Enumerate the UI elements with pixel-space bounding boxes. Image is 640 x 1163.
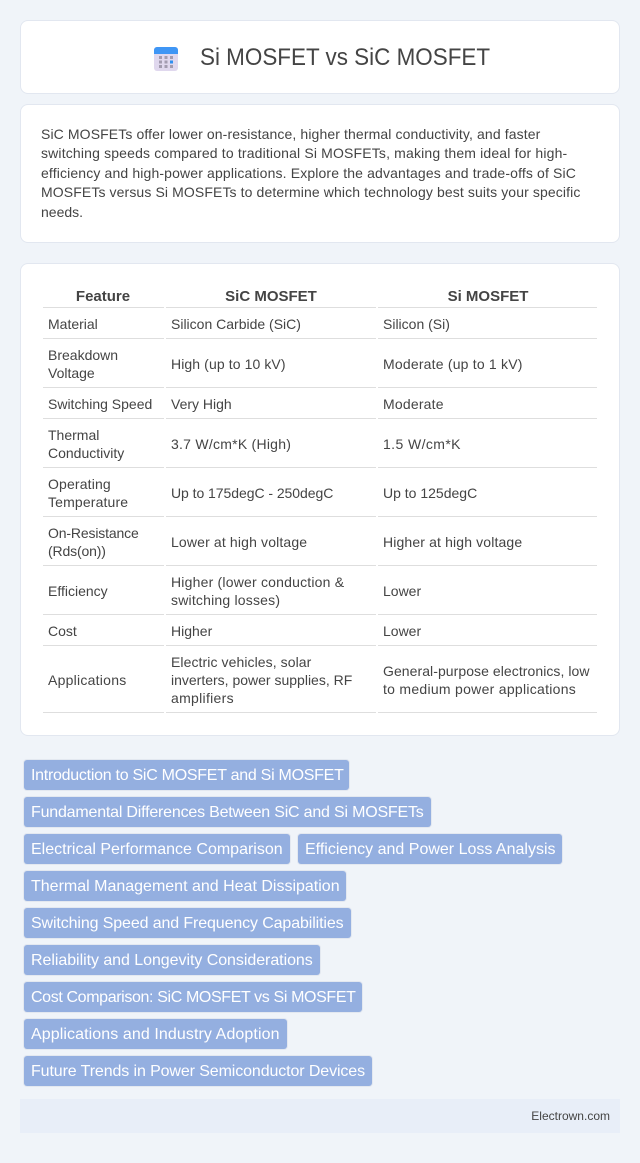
row: Operating Temperature — [48, 476, 128, 510]
comparison table: switching losses) — [171, 592, 280, 608]
row: Material: Material — [48, 316, 98, 332]
tag: efficiency: Efficiency and Power Loss Analysis — [305, 841, 556, 858]
tag: electrical performance: Electrical Performance Comparison — [31, 841, 283, 858]
comparison table: Up to 175degC - 250degC — [171, 485, 333, 501]
row: Cost: Cost — [48, 623, 77, 639]
footer bar — [20, 1099, 620, 1133]
title: Si MOSFET vs SiC MOSFET — [200, 44, 490, 71]
comparison table: Higher (lower conduction & — [171, 574, 344, 590]
tag: cost comparison: Cost Comparison: SiC MOSFET vs Si MOSFET — [31, 989, 356, 1006]
comparison table: Higher — [171, 623, 212, 639]
tag: switching speed: Switching Speed and Frequency Capabilities — [31, 915, 343, 932]
comparison table: 3.7 W/cm*K (High) — [171, 436, 291, 452]
comparison table: High (up to 10 kV) — [171, 356, 286, 372]
tag: future trends — [24, 1056, 372, 1086]
tag: applications: Applications and Industry Adoption — [31, 1026, 280, 1043]
comparison table: amplifiers — [171, 690, 234, 706]
row: Thermal Conductivity — [48, 427, 124, 461]
comparison table: to medium power applications — [383, 681, 576, 697]
comparison table: Moderate — [383, 396, 444, 412]
tag: thermal management — [24, 871, 346, 901]
row: Breakdown Voltage — [48, 347, 118, 381]
header panel — [20, 20, 620, 94]
comparison table: 1.5 W/cm*K — [383, 436, 461, 452]
row: Switching Speed: Switching Speed — [48, 396, 152, 412]
tag: reliability — [24, 945, 320, 975]
intro paragraph: needs. — [41, 204, 83, 220]
tag: future trends: Future Trends in Power Semiconductor Devices — [31, 1063, 365, 1080]
icon: calendar — [154, 47, 178, 71]
tag: cost comparison — [24, 982, 362, 1012]
row: On-Resistance: On-Resistance — [48, 525, 139, 541]
header: SiC MOSFET: SiC MOSFET — [225, 288, 317, 305]
tag: reliability: Reliability and Longevity Considerations — [31, 952, 313, 969]
comparison table: General-purpose electronics, low — [383, 663, 590, 679]
header: Si MOSFET: Si MOSFET — [448, 288, 528, 305]
footer source: Electrown.com — [531, 1109, 610, 1123]
comparison table: Up to 125degC — [383, 485, 477, 501]
tag: fundamental differences: Fundamental Differences Between SiC and Si MOSFETs — [31, 804, 424, 821]
comparison table: Moderate (up to 1 kV) — [383, 356, 523, 372]
comparison table: Very High — [171, 396, 232, 412]
comparison table — [43, 288, 597, 713]
row: Thermal Conductivity: Thermal — [48, 427, 99, 443]
tag: switching speed — [24, 908, 351, 938]
tag: thermal management: Thermal Management and Heat Dissipation — [31, 878, 340, 895]
tag: introduction: Introduction to SiC MOSFET and Si MOSFET — [31, 767, 344, 784]
row: Operating Temperature: Temperature — [48, 494, 128, 510]
intro paragraph: SiC MOSFETs offer lower on-resistance, higher thermal conductivity, and faster — [41, 126, 540, 142]
comparison table: Higher at high voltage — [383, 534, 522, 550]
tag: electrical performance — [24, 834, 290, 864]
tag: introduction — [24, 760, 349, 790]
intro paragraph: MOSFETs versus Si MOSFETs to determine which technology best suits your specific — [41, 184, 580, 200]
row: Efficiency: Efficiency — [48, 583, 108, 599]
tag: efficiency — [298, 834, 562, 864]
tag: applications — [24, 1019, 287, 1049]
row: On-Resistance: (Rds(on)) — [48, 543, 106, 559]
tag: fundamental differences — [24, 797, 431, 827]
comparison table: Silicon Carbide (SiC) — [171, 316, 301, 332]
comparison table: Lower at high voltage — [171, 534, 307, 550]
intro paragraph: efficiency and high-power applications. Explore the advantages and trade-offs of SiC — [41, 165, 576, 181]
comparison table: Electric vehicles, solar — [171, 654, 311, 670]
row: Operating Temperature: Operating — [48, 476, 111, 492]
row: Thermal Conductivity: Conductivity — [48, 445, 124, 461]
comparison table: inverters, power supplies, RF — [171, 672, 352, 688]
row: Breakdown Voltage: Breakdown — [48, 347, 118, 363]
comparison table panel — [20, 263, 620, 736]
section tags — [23, 759, 563, 1087]
row: On-Resistance — [48, 525, 139, 559]
intro text panel — [20, 104, 620, 243]
row: Applications: Applications — [48, 672, 126, 688]
intro paragraph: switching speeds compared to traditional Si MOSFETs, making them ideal for high- — [41, 145, 567, 161]
header: Feature: Feature — [76, 288, 130, 305]
comparison table: Silicon (Si) — [383, 316, 450, 332]
row: Breakdown Voltage: Voltage — [48, 365, 95, 381]
comparison table: Lower — [383, 583, 421, 599]
intro paragraph — [41, 126, 580, 220]
comparison table: Lower — [383, 623, 421, 639]
